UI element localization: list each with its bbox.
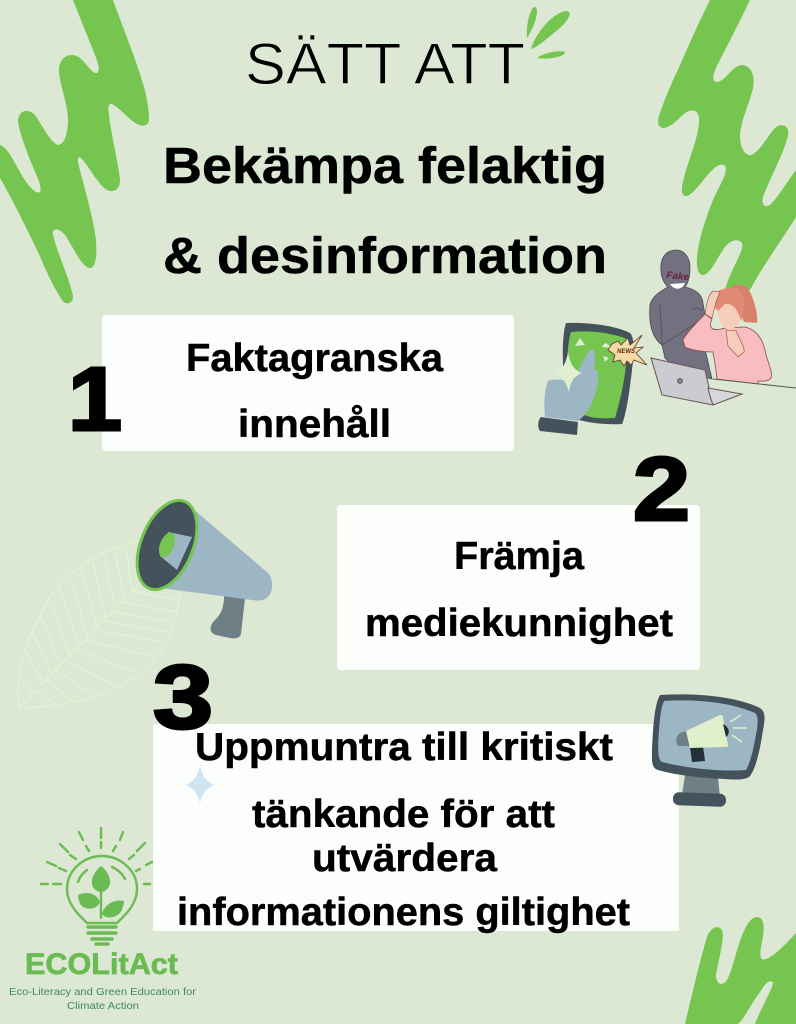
illustration: leaf outline bbox=[18, 540, 180, 708]
heading bbox=[163, 137, 607, 284]
heading: & desinformation bbox=[163, 227, 607, 284]
icon: hooded man: Fake bbox=[666, 270, 690, 283]
number 3: 3 bbox=[153, 648, 213, 748]
icon: sleeve cuff bbox=[538, 417, 578, 435]
pink sweater bbox=[683, 314, 772, 384]
card 2: Främja bbox=[454, 535, 584, 578]
icon: laptop bbox=[651, 358, 742, 405]
handle bbox=[211, 596, 245, 638]
card 3 bbox=[153, 724, 679, 934]
decorative blob: bottom right bbox=[685, 917, 796, 1024]
table line bbox=[713, 379, 796, 388]
decorative blob: top right bbox=[658, 0, 796, 290]
icon: tablet bbox=[563, 323, 634, 424]
number 2: 2 bbox=[633, 440, 690, 540]
illustration: monitor with megaphone bbox=[652, 694, 765, 807]
number 1: 1 bbox=[68, 350, 122, 450]
card 1: Faktagranska bbox=[186, 337, 443, 380]
title: SÄTT ATT: SÄTT ATT bbox=[245, 32, 525, 97]
icon: blue sparkle bbox=[186, 764, 214, 804]
card 2 bbox=[337, 505, 700, 670]
decorative blob: top left bbox=[0, 0, 149, 303]
card 3: informationens giltighet bbox=[177, 891, 630, 934]
megaphone on screen bbox=[676, 731, 690, 746]
cone bbox=[160, 502, 272, 601]
card 3: utvärdera bbox=[312, 837, 497, 880]
raised hand and chin hand bbox=[705, 291, 744, 357]
icon: news burst: NEWS bbox=[617, 349, 635, 355]
ponytail and hair back bbox=[732, 285, 757, 323]
heading: Bekämpa felaktig bbox=[163, 137, 607, 194]
screen bbox=[658, 700, 758, 771]
illustration: megaphone bbox=[125, 492, 272, 638]
card 2: mediekunnighet bbox=[365, 602, 673, 645]
card 1: innehåll bbox=[238, 403, 391, 446]
icon: hooded man bbox=[650, 250, 712, 379]
title: SÄTT ATT bbox=[245, 7, 570, 97]
tagline bbox=[9, 986, 197, 1012]
hair front bbox=[713, 288, 745, 321]
logo: ECOLitAct bbox=[9, 828, 197, 1012]
icon: light bulb with plant bbox=[41, 828, 152, 944]
tagline: Eco-Literacy and Green Education for bbox=[9, 986, 197, 998]
stand bbox=[682, 775, 720, 797]
card 3: Uppmuntra till kritiskt bbox=[195, 726, 613, 769]
card 1 bbox=[102, 315, 514, 451]
wordmark: ECOLitAct bbox=[25, 948, 178, 981]
icon: hand bbox=[544, 349, 598, 421]
mouth bbox=[125, 492, 209, 598]
card 3: tänkande för att bbox=[252, 793, 555, 836]
icon: woman with pink sweater bbox=[683, 285, 772, 384]
icon: green accent leaves bbox=[527, 7, 570, 59]
face bbox=[718, 303, 741, 329]
frame bbox=[652, 694, 765, 780]
icon: sparkle bbox=[555, 352, 582, 392]
illustration: fake news spreader and worried woman bbox=[650, 250, 796, 405]
illustration: hand tapping tablet bbox=[538, 323, 647, 435]
tagline: Climate Action bbox=[67, 1000, 139, 1012]
